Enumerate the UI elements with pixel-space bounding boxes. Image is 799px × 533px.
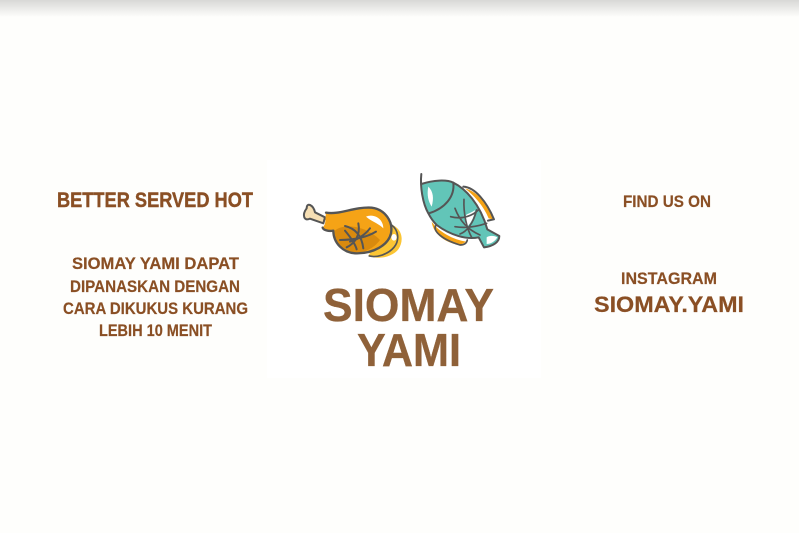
text block: instagram handle: SIOMAY.YAMI [594, 292, 744, 317]
icon: fish [421, 174, 499, 247]
text block: instagram handle [594, 270, 744, 317]
top shadow band [0, 0, 799, 17]
text block: instagram handle: INSTAGRAM [621, 270, 717, 288]
logo panel [267, 160, 541, 378]
text block: heating instructions: SIOMAY YAMI DAPAT [72, 255, 239, 273]
text block: heating instructions: DIPANASKAN DENGAN [70, 278, 240, 296]
logo wordmark: SIOMAY [323, 279, 494, 331]
text block: heating instructions: LEBIH 10 MENIT [99, 322, 212, 340]
text block: heating instructions: CARA DIKUKUS KURANG [63, 300, 248, 318]
text block: heating instructions [63, 255, 248, 340]
icon: chicken drumstick [304, 205, 402, 258]
heading: better served hot: BETTER SERVED HOT [57, 189, 253, 212]
logo wordmark: YAMI [357, 324, 461, 376]
logo wordmark [323, 279, 494, 376]
text: find us on: FIND US ON [623, 193, 711, 211]
